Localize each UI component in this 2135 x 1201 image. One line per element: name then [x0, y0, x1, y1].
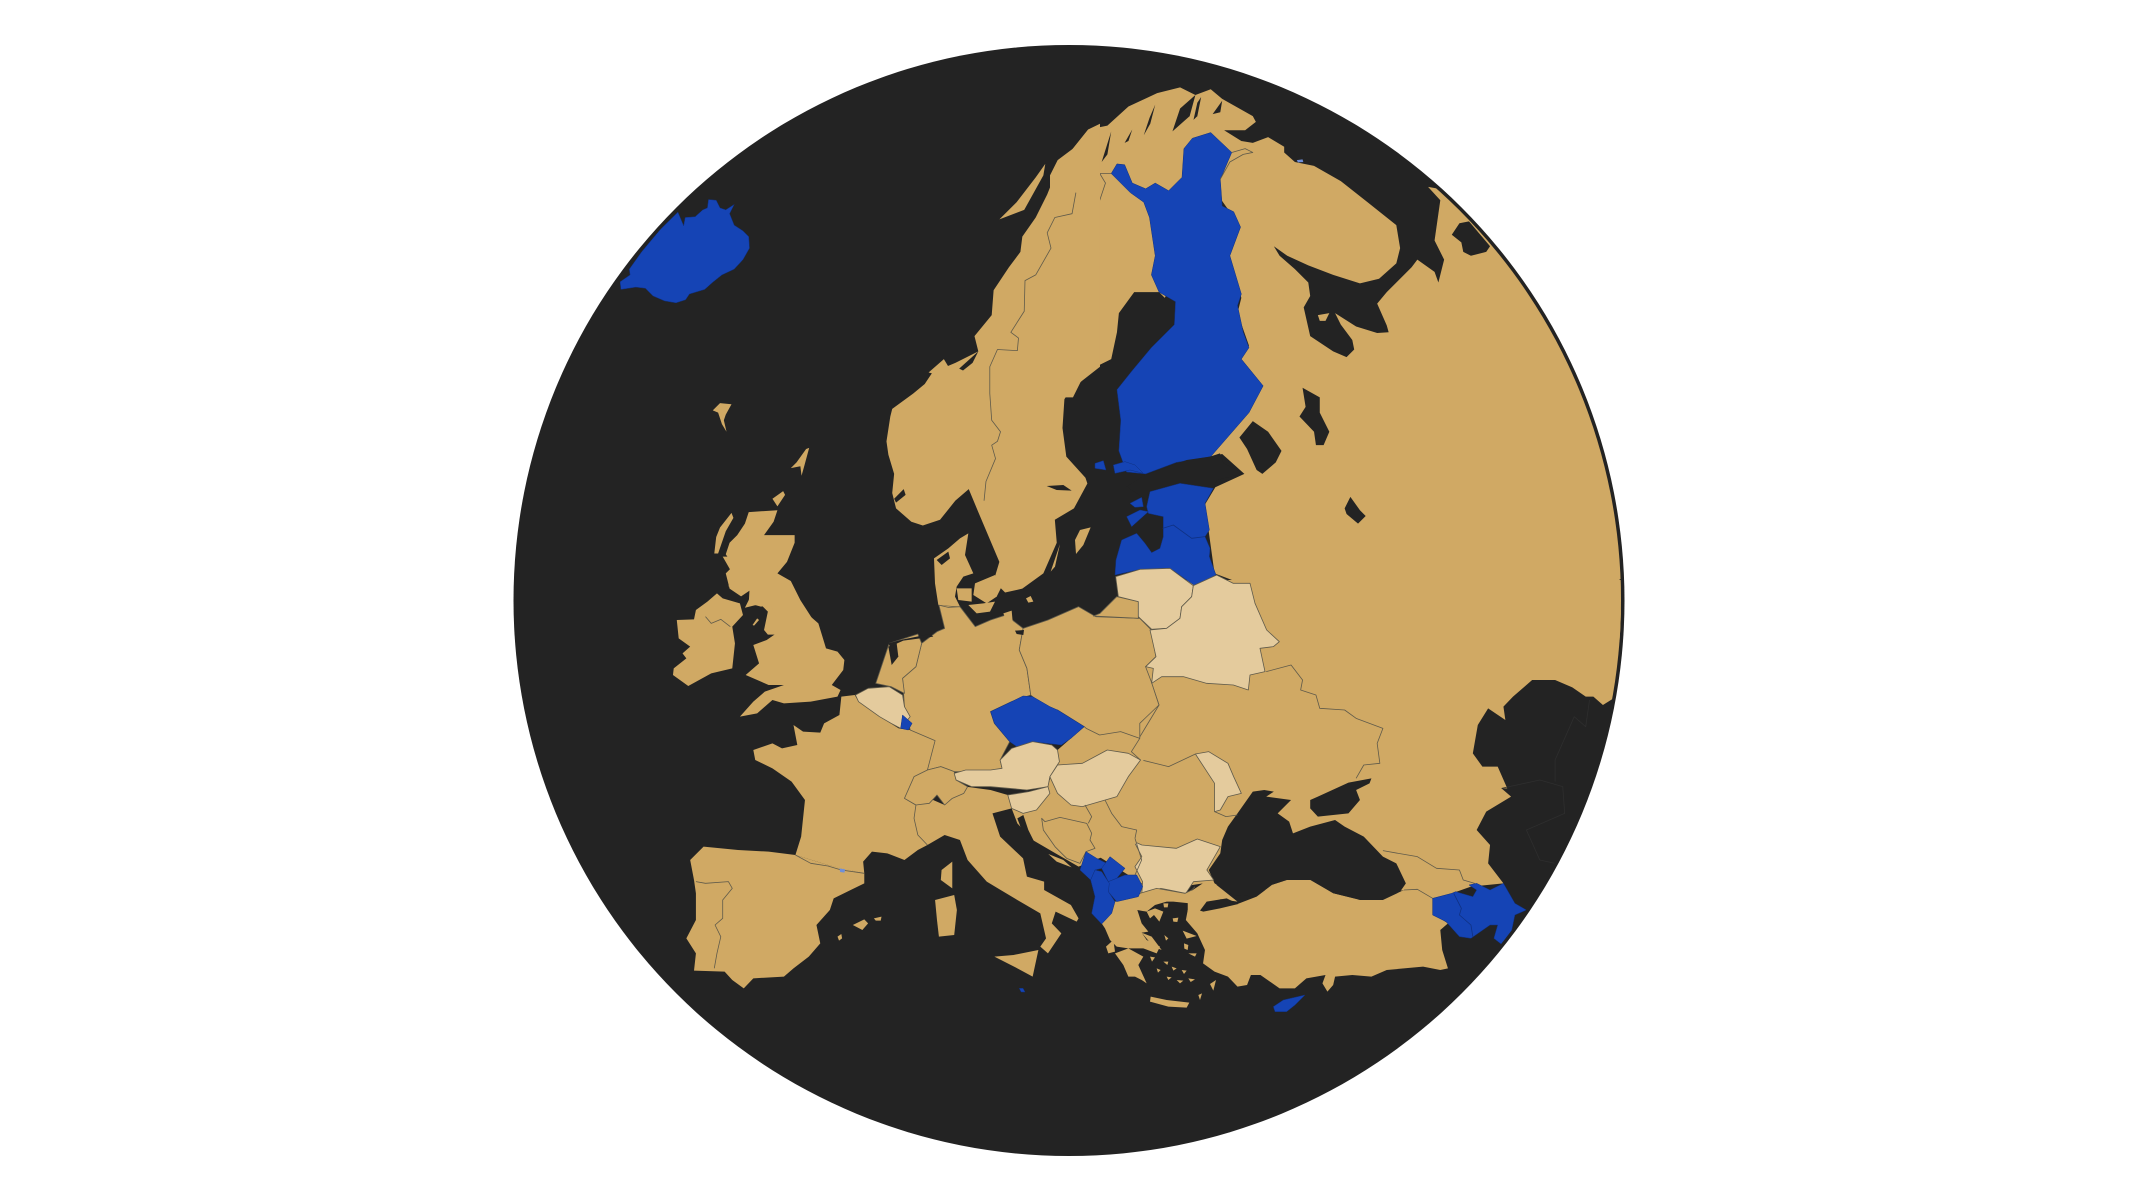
North Macedonia — [1108, 875, 1143, 902]
Limfjord — [937, 552, 950, 565]
north-west land — [620, 124, 1100, 635]
Menorca — [874, 917, 882, 921]
Finland north-west border — [1220, 149, 1253, 179]
Ibiza — [837, 934, 842, 941]
Outer Hebrides — [714, 513, 733, 553]
Greece north border — [1115, 887, 1195, 902]
Sicily — [994, 950, 1038, 977]
Bulgaria — [1134, 839, 1220, 893]
Zealand — [973, 575, 1002, 603]
Norway and Sweden — [886, 124, 1100, 592]
Montenegro — [1080, 852, 1107, 880]
Kaliningrad — [1093, 597, 1138, 618]
Kazakhstan border — [1555, 700, 1590, 782]
IJsselmeer — [888, 643, 898, 665]
eastern gulf — [1619, 579, 1621, 610]
lake Onega — [1299, 388, 1329, 445]
Aland islands — [1095, 461, 1106, 470]
Austria — [954, 742, 1059, 790]
Aegean islands — [1150, 903, 1216, 1000]
Sardinia — [935, 895, 957, 937]
Oland — [1051, 544, 1060, 572]
Italy — [914, 787, 1079, 953]
Romania Ukraine lower border — [1215, 812, 1237, 817]
Danish and German Baltic detail — [888, 533, 1024, 665]
Onega peninsula — [1318, 313, 1329, 321]
lake Ladoga — [1239, 421, 1282, 474]
Pyrenees border — [795, 855, 864, 873]
Sea of Azov — [1310, 778, 1371, 817]
Funen — [957, 588, 972, 602]
Jutland — [934, 533, 973, 607]
Gotland — [1075, 527, 1091, 554]
Lolland — [968, 602, 995, 613]
Georgia Turkey border — [1404, 889, 1433, 898]
map land layers — [620, 87, 1701, 1012]
Finnish archipelago — [1113, 462, 1143, 473]
Serbia Bulgaria border — [1135, 838, 1142, 875]
Czechia — [991, 696, 1084, 748]
Crete — [1150, 997, 1189, 1008]
Slovenia — [1008, 787, 1050, 813]
Sweden Norway northern border — [1100, 173, 1112, 200]
Lofoten — [999, 164, 1045, 219]
Faroe islands — [713, 403, 732, 432]
Serbia Hungary border — [1085, 805, 1092, 823]
Rugen — [1003, 611, 1013, 622]
Trondheim fjord — [959, 351, 978, 371]
Albania — [1091, 870, 1115, 924]
Bornholm — [1026, 596, 1033, 603]
Armenia border — [1454, 893, 1473, 937]
Northern Ireland border — [705, 617, 730, 627]
north-east land and Finland — [1050, 87, 1621, 642]
Balkans and Aegean — [1017, 800, 1305, 1012]
Thrace — [1188, 883, 1238, 911]
Poland — [1019, 607, 1159, 738]
Ireland — [673, 593, 743, 686]
Dalmatian islands — [1048, 854, 1072, 867]
Serbia Romania border — [1105, 800, 1137, 838]
western and central land — [673, 557, 1159, 992]
Moldova — [1195, 752, 1241, 812]
Great Britain south — [723, 557, 844, 717]
Ukraine Russia border — [1266, 665, 1383, 778]
Estonia Latvia border — [1163, 525, 1205, 538]
eastern land and Black Sea — [1100, 580, 1621, 992]
Rybinsk reservoir — [1345, 497, 1366, 524]
Estonia and Latvia — [1115, 483, 1216, 586]
Iceland — [620, 200, 749, 303]
Gulf of Finland — [1127, 453, 1243, 500]
Portugal border — [696, 882, 732, 968]
Finland — [1111, 133, 1263, 474]
Belarus — [1146, 575, 1279, 690]
Norwegian coast islands — [929, 359, 948, 374]
Turkey — [1186, 880, 1448, 992]
Wadden sea — [888, 634, 933, 647]
Mallorca — [853, 919, 868, 930]
Cheshskaya bay — [1452, 221, 1490, 256]
France — [753, 695, 935, 873]
Luxembourg — [901, 715, 912, 730]
Chalkidiki — [1147, 908, 1163, 922]
Norway Sweden border — [984, 193, 1076, 501]
Bosnia border — [1042, 817, 1095, 863]
central Balkans land — [1012, 727, 1144, 867]
Scotland — [726, 510, 818, 635]
Orkney — [772, 491, 785, 506]
Black Sea — [1209, 790, 1406, 900]
Barents speck — [1297, 159, 1303, 162]
Isle of Man — [753, 618, 759, 626]
Armenia and Azerbaijan — [1433, 883, 1526, 944]
Switzerland — [904, 767, 968, 805]
Greece mainland — [1102, 888, 1192, 953]
europe globe map — [514, 45, 1624, 1156]
Ukraine borders — [1140, 684, 1196, 767]
Malaren — [1047, 485, 1072, 491]
Denmark Germany border — [938, 605, 960, 607]
Lithuania — [1116, 568, 1193, 629]
Sea of Marmara — [1200, 898, 1238, 912]
Caspian region borders — [1502, 780, 1565, 863]
Belgium — [855, 687, 910, 728]
Shetland — [791, 448, 809, 476]
France Italy border — [904, 798, 927, 845]
Andorra — [839, 868, 845, 873]
Cyprus — [1273, 995, 1305, 1012]
Szczecin lagoon — [1015, 630, 1024, 635]
Corsica — [941, 862, 952, 888]
Netherlands — [876, 634, 922, 693]
Slovakia Hungary east — [1131, 738, 1141, 760]
Sogne fjord — [894, 489, 906, 503]
Peloponnese — [1115, 948, 1147, 983]
Saaremaa — [1127, 510, 1148, 527]
Baltic states and Belarus — [1026, 453, 1279, 690]
globe ocean disc — [514, 45, 1624, 1156]
Dalmatian inlet — [1017, 815, 1043, 852]
Hiiumaa — [1130, 497, 1143, 507]
Spain and Portugal — [686, 847, 864, 988]
Malta — [1019, 988, 1025, 992]
Kosovo — [1102, 857, 1125, 882]
Germany — [903, 605, 1031, 772]
Hungary — [1050, 750, 1141, 807]
Corfu and Ionian islands — [1106, 940, 1115, 953]
Georgia Russia border — [1383, 851, 1475, 883]
Euboea — [1142, 933, 1162, 950]
